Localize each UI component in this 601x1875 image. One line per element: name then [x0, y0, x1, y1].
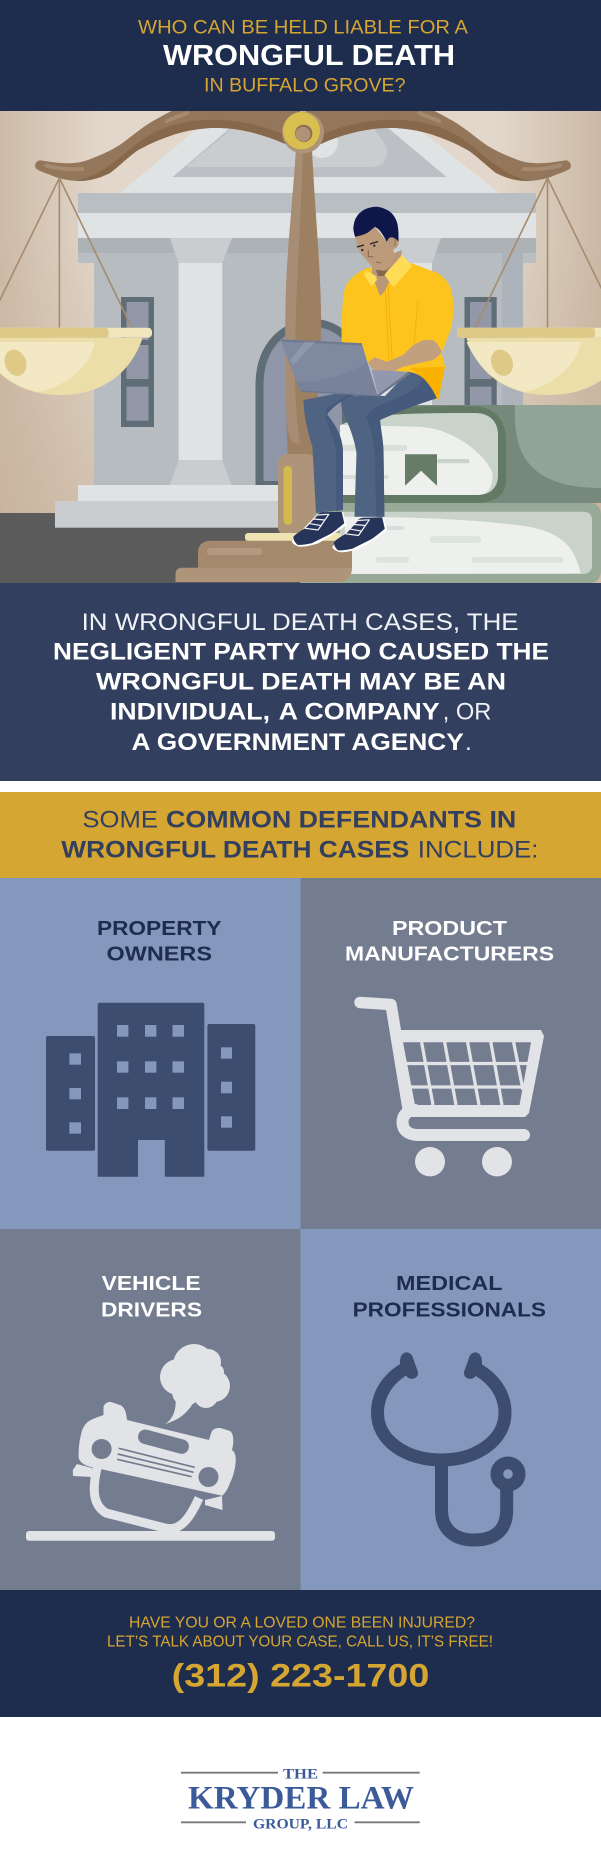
- panel: common defendants heading: [0, 792, 601, 878]
- call to action line 1: HAVE YOU OR A LOVED ONE BEEN INJURED?: [129, 1614, 475, 1631]
- panel: vehicle drivers: [0, 1229, 300, 1590]
- panel: property owners: [0, 878, 300, 1229]
- right scale pan: [457, 328, 601, 395]
- logo: The Kryder Law Group, LLC: GROUP, LLC: [253, 1816, 348, 1832]
- panel: medical professionals: [300, 1229, 601, 1590]
- label: product manufacturers: [345, 917, 554, 966]
- heading line 2: WRONGFUL DEATH CASES: [61, 836, 409, 863]
- heading: in Buffalo Grove: IN BUFFALO GROVE?: [204, 75, 406, 96]
- heading: wrongful death: WRONGFUL DEATH: [163, 40, 455, 72]
- statement line 3: WRONGFUL DEATH MAY BE AN: [96, 668, 506, 696]
- logo: The Kryder Law Group, LLC: THE: [283, 1767, 318, 1783]
- panel: intro statement: [0, 583, 601, 781]
- window right: [464, 297, 497, 405]
- label: product manufacturers: MANUFACTURERS: [345, 943, 554, 966]
- statement line 5: .: [465, 729, 472, 756]
- courthouse: [78, 111, 536, 485]
- call to action line 2: LET’S TALK ABOUT YOUR CASE, CALL US, IT’S FREE!: [107, 1633, 493, 1650]
- heading: who can be held liable: WHO CAN BE HELD LIABLE FOR A: [138, 18, 468, 39]
- heading line 1: COMMON DEFENDANTS IN: [166, 806, 516, 833]
- scale beam right arm: [306, 108, 571, 181]
- laptop: [280, 339, 410, 396]
- scale stand: [176, 150, 352, 582]
- phone number: (312) 223-1700: [172, 1658, 429, 1694]
- scale pivot ring: [282, 112, 324, 154]
- scale beam left arm: [35, 108, 300, 181]
- logo: The Kryder Law Group, LLC: [181, 1767, 420, 1832]
- panel: product manufacturers: [300, 878, 601, 1229]
- hair: [353, 207, 399, 242]
- courthouse steps: [55, 485, 278, 528]
- label: vehicle drivers: VEHICLE: [102, 1272, 201, 1295]
- illustration: man with laptop on books before courthouse and scales: [0, 108, 601, 583]
- ground: [0, 513, 300, 583]
- smoke cloud: [160, 1344, 230, 1424]
- left scale strings: [0, 178, 132, 328]
- arm: [368, 340, 442, 371]
- heading line 2: INCLUDE:: [418, 836, 538, 863]
- lower book: [300, 503, 601, 583]
- label: medical professionals: [353, 1272, 546, 1322]
- shirt: [341, 263, 453, 400]
- label: medical professionals: PROFESSIONALS: [353, 1299, 546, 1322]
- label: property owners: PROPERTY: [97, 917, 222, 940]
- label: vehicle drivers: DRIVERS: [101, 1299, 202, 1322]
- man: [280, 207, 453, 552]
- head: [353, 207, 399, 271]
- right leg: [340, 372, 437, 517]
- upper book: [340, 405, 601, 503]
- statement line 5: A GOVERNMENT AGENCY: [132, 729, 464, 756]
- left leg: [303, 392, 350, 513]
- icon: stethoscope: [378, 1352, 526, 1540]
- label: vehicle drivers: [101, 1272, 202, 1322]
- label: medical professionals: MEDICAL: [396, 1272, 502, 1295]
- bookmark: [405, 454, 437, 486]
- statement line 2: NEGLIGENT PARTY WHO CAUSED THE: [53, 638, 549, 666]
- label: product manufacturers: PRODUCT: [392, 917, 508, 940]
- panel: header: [0, 0, 601, 111]
- icon: overturned car: [26, 1344, 275, 1541]
- statement line 4: [110, 698, 491, 726]
- heading line 1: SOME: [82, 806, 158, 833]
- label: property owners: [97, 917, 222, 966]
- left shoe: [292, 512, 347, 547]
- window left: [121, 297, 154, 427]
- icon: buildings: [46, 1003, 255, 1177]
- statement line 1: IN WRONGFUL DEATH CASES, THE: [82, 609, 519, 636]
- icon: shopping cart: [360, 1002, 544, 1176]
- panel: call to action: [0, 1590, 601, 1717]
- statement line 4: INDIVIDUAL,: [110, 698, 270, 726]
- statement line 4: , OR: [443, 698, 491, 726]
- neck and collar: [364, 250, 412, 296]
- heading line 2: [61, 836, 539, 863]
- arched door: [260, 323, 346, 485]
- right scale strings: [475, 178, 601, 328]
- label: property owners: OWNERS: [106, 943, 212, 966]
- right shoe: [332, 517, 387, 552]
- statement line 4: A COMPANY: [279, 698, 440, 726]
- left scale pan: [0, 328, 152, 395]
- logo: The Kryder Law Group, LLC: KRYDER LAW: [188, 1780, 414, 1816]
